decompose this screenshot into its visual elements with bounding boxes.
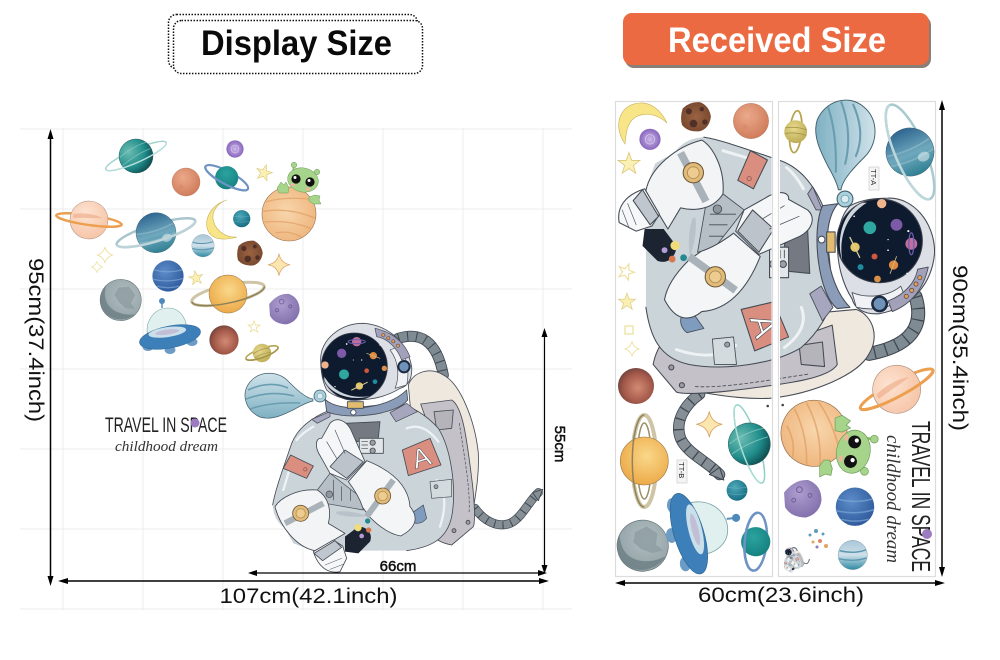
sleeve belt and button [367,480,393,517]
planet: purple [784,480,822,518]
arm patch [283,455,313,478]
planet: small teal [727,480,747,501]
planet: rust [733,103,769,139]
visor [321,333,387,400]
suit torso [273,403,454,551]
icon: crescent moon [207,200,237,239]
planet: teal with blue ring [739,512,773,572]
sticker sheet outlines [616,102,936,576]
lower chest pockets [317,473,367,517]
icon: outline sparkles [92,248,112,272]
planet: grey moon [100,279,141,321]
upper glove [316,420,365,480]
badge A [402,438,441,476]
balloon planet [816,100,875,207]
dimension: astronaut width [248,558,547,576]
helmet top panel [375,328,410,360]
icon: star [188,269,204,285]
left lower arm [275,490,345,551]
dots [766,404,784,407]
balloon planet on left astronaut [245,373,326,418]
icon: alien [277,162,321,204]
planet: small olive ringed [243,339,281,367]
planet: big orange [772,391,856,476]
icon: four point star [696,411,722,437]
planet: teal with blue ring [200,156,253,199]
icon: outline star [248,321,260,332]
dimension: left width [58,578,549,608]
icon: star [254,163,274,182]
planet: olive ringed [783,110,809,154]
planet: brown [681,102,711,131]
label: TT-B: TT-B [677,462,686,478]
planet: teal ringed [717,399,782,489]
planet: teal ringed [99,127,173,185]
planet: peach ringed [849,349,944,430]
label: TT-A [869,167,879,190]
dimension: left height [24,129,54,586]
backpack [408,371,478,545]
background grid [20,128,572,610]
planet: navy [152,260,184,292]
planet: navy [836,488,874,526]
flashlight with planets [345,518,371,553]
dimension: astronaut height: 55cm [551,426,568,462]
planet: rust [172,168,200,196]
helmet shell [321,323,412,400]
heading: Received Size badge: Received Size [668,21,886,60]
tagline rotated: TRAVEL IN SPACE [906,421,936,572]
heading: Display Size badge [168,14,422,74]
planet: gold ringed vertical [620,415,668,507]
crossing arm sleeve [348,461,415,536]
dimension: received height: 90cm(35.4inch) [948,265,971,431]
helmet side plate [390,347,408,388]
planet: blue ringed [868,96,952,208]
suit highlights [283,427,444,527]
planet: ice [838,540,867,570]
planet: small ice [192,234,214,257]
chest panel [345,422,383,453]
planet: purple [269,294,300,324]
dimension: left width: 107cm(42.1inch) [220,585,398,608]
icon: star [618,152,640,173]
planet: violet [639,129,661,150]
planet: gold ringed [188,268,268,320]
dimension: astronaut width: 66cm [380,558,416,575]
icon: UFO [661,484,746,580]
air tube [398,336,443,375]
dimension: received width [615,580,945,607]
tagline rotated: childhood dream [882,435,903,563]
icon: crescent moon [619,103,667,144]
right sheet stickers [766,96,952,574]
side strap and blue tube [407,479,452,523]
dimension: received width: 60cm(23.6inch) [698,584,864,607]
planet: small teal [233,210,250,227]
heading: Received Size badge [623,13,931,68]
dimension: astronaut height [542,328,568,574]
planet: blue ringed [111,202,201,264]
shoulder panels [312,403,417,423]
planet: small violet [226,140,244,158]
icons: outline stars and sparkles [616,261,639,356]
dimension: left height: 95cm(37.4inch) [24,258,47,422]
planet: red [618,368,654,404]
label: TT-A: TT-A [869,169,878,185]
helmet ring [398,361,410,372]
lower glove [313,540,347,572]
tagline rotated [882,421,936,572]
icon: four point star [268,254,290,276]
tagline: Travel in Space (left) [105,414,227,455]
tagline: Travel in Space (left): childhood dream [115,439,218,455]
arm belt and button [285,503,323,523]
planet cluster [54,127,321,367]
astronaut illustration [273,323,543,572]
sticker sheet astronaut split in two [619,137,935,480]
label: TT-B [677,460,687,483]
planet: red [209,325,239,355]
icon: alien [820,415,878,477]
thumbnail of finished design [779,529,828,574]
icon: UFO [137,298,203,354]
planet: grey moon [610,513,676,579]
planet: peach ringed [54,197,124,243]
heading: Display Size badge: Display Size [201,24,392,63]
dimension: received height [939,100,971,577]
left sheet stickers [610,102,782,580]
collar [325,390,408,416]
planet: big orange [262,187,316,241]
tagline: Travel in Space (left): TRAVEL IN SPACE [105,414,227,437]
badge A: A [408,441,434,475]
tail cable [475,489,543,525]
planet: brown asteroid [237,241,263,266]
